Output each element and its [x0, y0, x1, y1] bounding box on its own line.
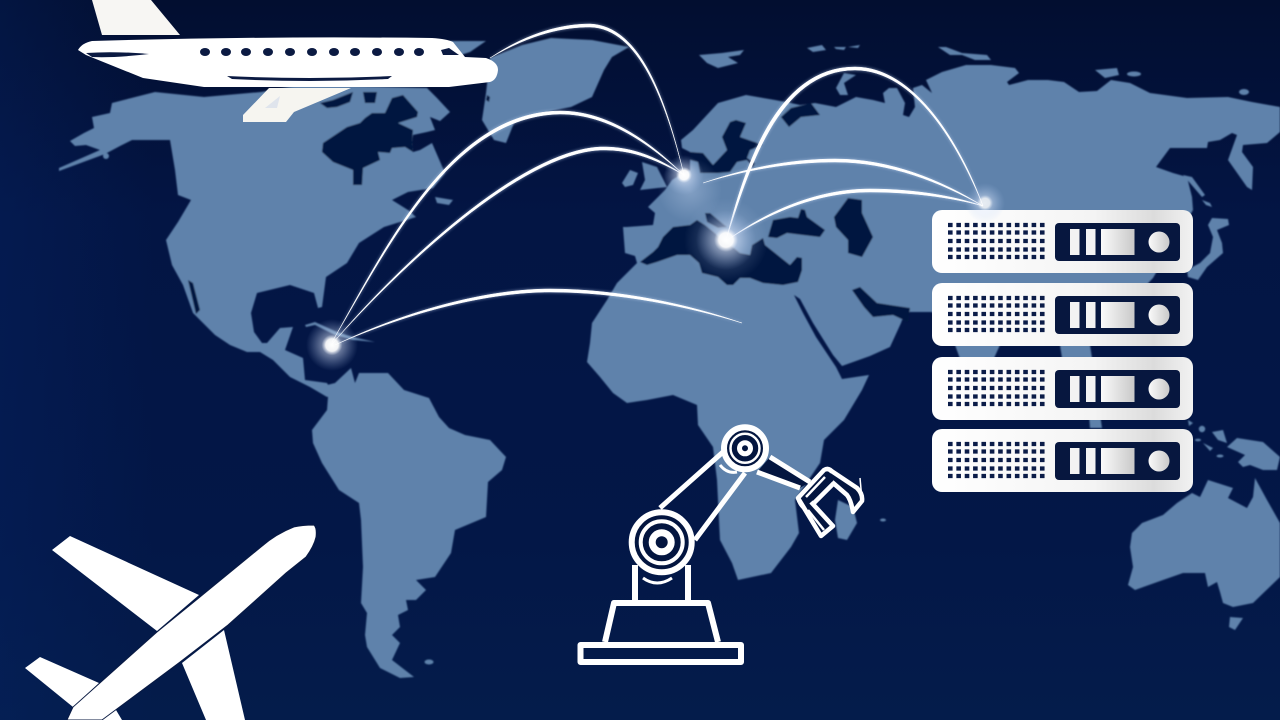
server rack	[932, 210, 1193, 492]
robot base	[580, 565, 741, 662]
server unit 4	[932, 429, 1193, 492]
arc: mediterranean to server low	[726, 189, 983, 241]
afro-eurasia	[587, 65, 1280, 580]
greenland	[482, 38, 629, 143]
elbow joint	[724, 427, 766, 469]
airplane: top view	[25, 525, 316, 720]
arc: caribbean to western europe high	[332, 111, 684, 342]
node: caribbean	[306, 319, 358, 371]
forearm	[757, 457, 810, 488]
robot arm	[580, 427, 862, 662]
flight arcs	[332, 24, 983, 345]
server unit 2	[932, 283, 1193, 346]
airplane: side view	[78, 0, 498, 122]
windows	[200, 48, 424, 56]
north america	[59, 85, 450, 397]
small islands	[103, 41, 1280, 664]
node: mediterranean	[684, 198, 768, 282]
madagascar	[835, 500, 857, 540]
glowing nodes	[306, 155, 768, 371]
arc: western europe to server	[703, 159, 983, 206]
upper arm	[660, 452, 745, 540]
server unit 3	[932, 357, 1193, 420]
australia	[1128, 478, 1280, 607]
server unit 1	[932, 210, 1193, 273]
arc: greenland to western europe	[490, 24, 684, 175]
inland seas and bays	[188, 92, 910, 322]
arc: mediterranean to server high	[726, 67, 983, 240]
node: western europe	[658, 155, 722, 222]
gripper	[798, 469, 862, 536]
arc: caribbean to africa	[335, 289, 742, 345]
shoulder joint	[632, 512, 692, 572]
arc: caribbean to western europe low	[332, 147, 684, 344]
node: server hub	[965, 183, 1005, 223]
south america	[312, 368, 506, 678]
